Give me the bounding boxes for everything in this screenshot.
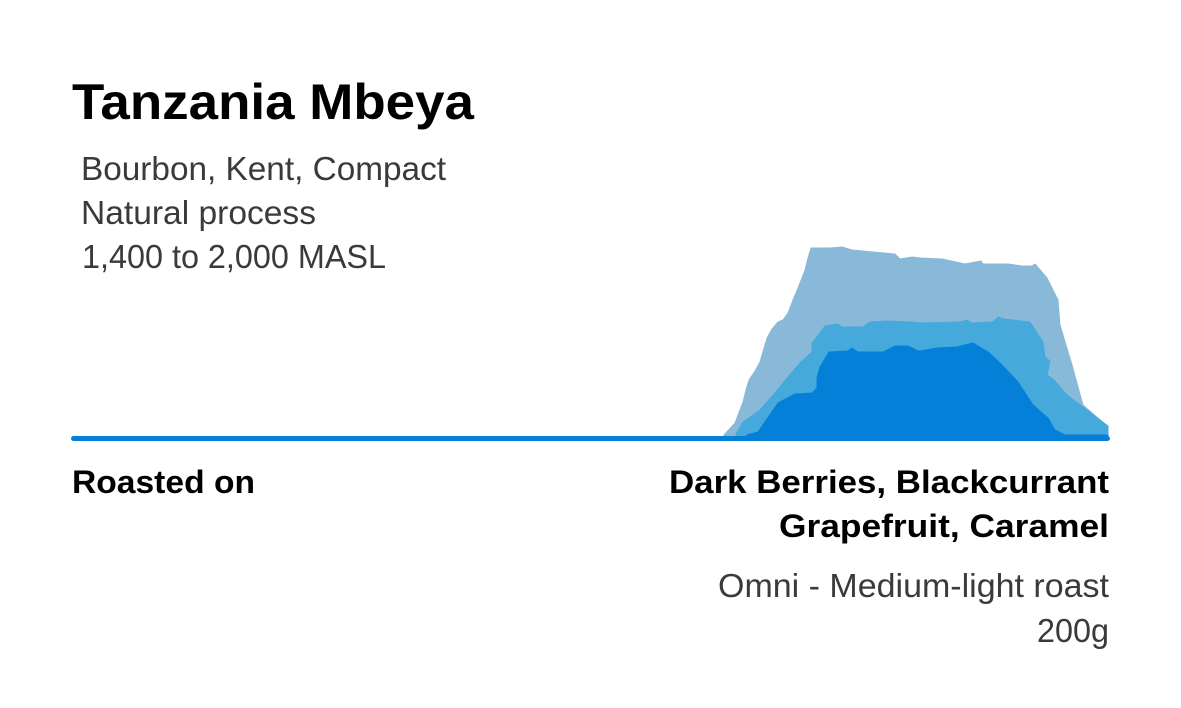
notes line two: Grapefruit, Caramel <box>779 508 1109 544</box>
roast level: Omni - Medium-light roast <box>718 567 1109 604</box>
dark area layer <box>747 343 1108 438</box>
roasted on label: Roasted on <box>72 464 255 500</box>
roast and weight <box>718 567 1109 649</box>
title: Tanzania Mbeya <box>72 74 475 130</box>
light area layer <box>724 247 1108 438</box>
process: Natural process <box>81 194 316 231</box>
varieties: Bourbon, Kent, Compact <box>81 150 446 187</box>
weight: 200g <box>1037 612 1109 649</box>
coffee details <box>81 150 446 275</box>
flavour area chart <box>71 247 1110 441</box>
notes line one: Dark Berries, Blackcurrant <box>669 464 1109 500</box>
baseline <box>71 436 1110 441</box>
tasting notes <box>669 464 1109 544</box>
altitude: 1,400 to 2,000 MASL <box>82 238 386 275</box>
medium area layer <box>736 317 1108 438</box>
